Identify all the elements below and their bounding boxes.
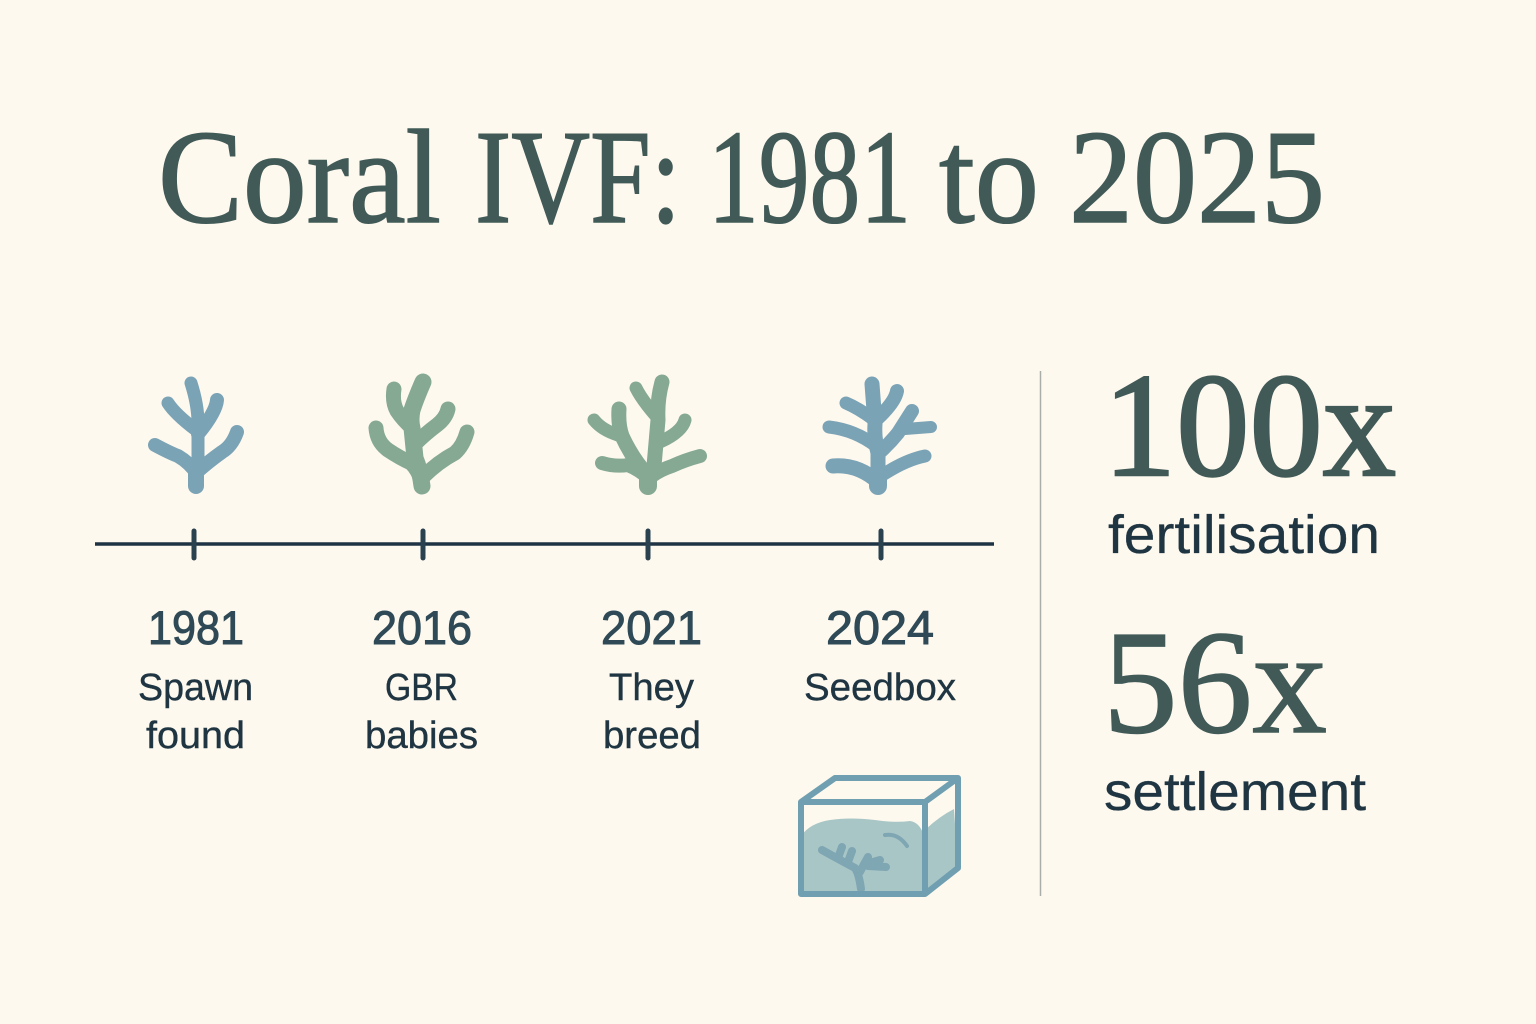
- milestone: 1981: 1981: [148, 601, 244, 654]
- milestone: 2021: 2021: [601, 601, 702, 654]
- title: Coral: [158, 103, 441, 251]
- milestone: 1981: Spawn: [138, 667, 253, 709]
- milestone: 2021: They: [609, 667, 694, 709]
- milestone: 2021: breed: [603, 715, 701, 757]
- title: 2025: [1069, 103, 1325, 251]
- icon: coral 1981: [155, 383, 237, 486]
- stat: 100x fertilisation: 100x: [1103, 344, 1396, 508]
- icon: coral 2016: [376, 382, 467, 486]
- milestone: 1981: [138, 601, 253, 757]
- title: IVF:: [475, 103, 681, 251]
- title: to: [939, 103, 1039, 251]
- icon: coral 2024: [829, 384, 931, 486]
- icon: seedbox tank: [801, 778, 958, 894]
- icon: coral 2021: [594, 382, 700, 486]
- title: [158, 103, 1325, 251]
- divider: [1040, 371, 1042, 896]
- stat: 56x settlement: 56x: [1103, 601, 1327, 765]
- milestone: 2024: 2024: [826, 601, 934, 654]
- milestone: 2016: 2016: [372, 601, 472, 654]
- stat: 100x fertilisation: fertilisation: [1108, 505, 1380, 565]
- stat: 56x settlement: [1103, 601, 1366, 822]
- milestone: 2016: [365, 601, 478, 757]
- milestone: 2024: Seedbox: [804, 667, 956, 709]
- milestone: 2016: babies: [365, 715, 478, 757]
- title: 1981: [708, 103, 911, 251]
- milestone: 2024: [804, 601, 956, 709]
- milestone: 2016: GBR: [385, 667, 458, 709]
- panel: timeline: [95, 382, 994, 894]
- milestone: 2021: [601, 601, 702, 757]
- timeline axis: [95, 531, 994, 558]
- stat: 56x settlement: settlement: [1104, 762, 1366, 822]
- milestone: 1981: found: [146, 715, 245, 757]
